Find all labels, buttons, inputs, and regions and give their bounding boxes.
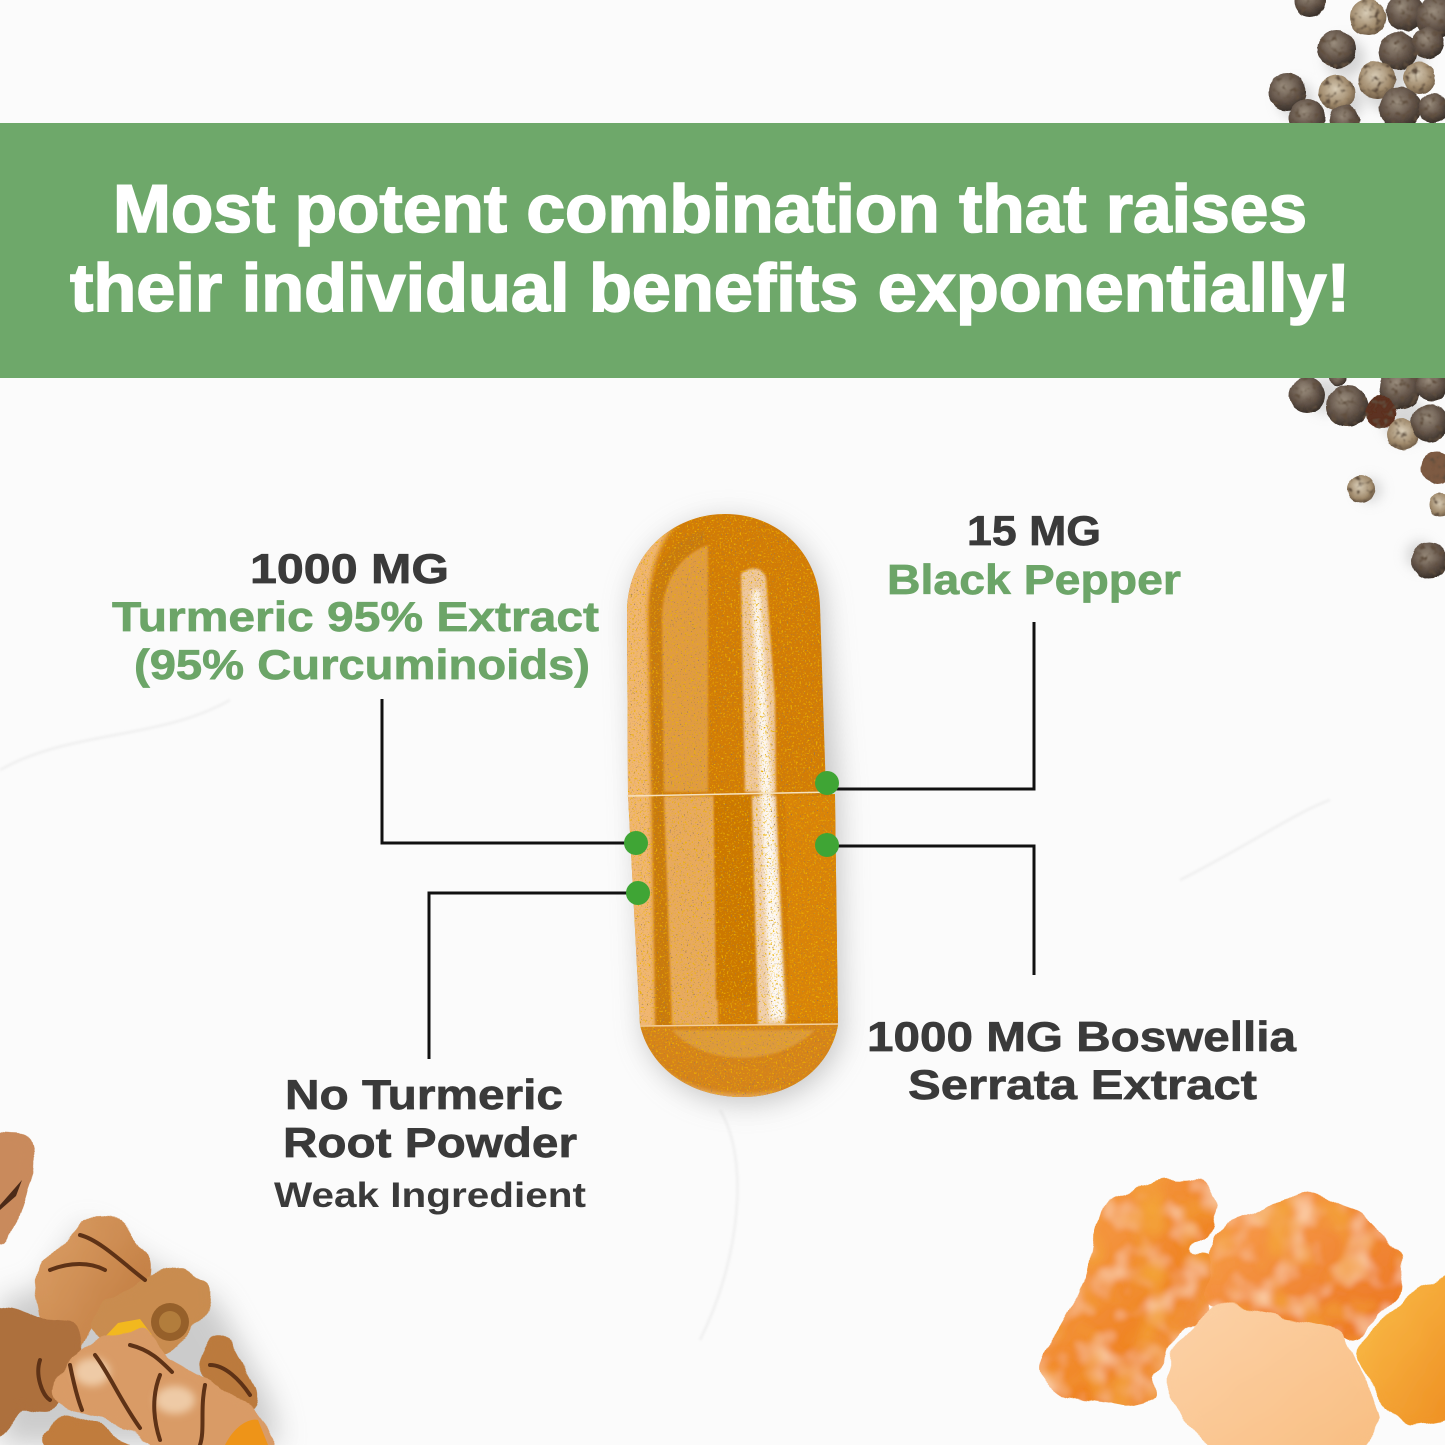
callout: boswellia: Serrata Extract [908,1061,1257,1108]
callout: no turmeric root powder [274,1071,586,1215]
callout: turmeric extract [112,545,599,688]
callout: turmeric extract: 1000 MG [250,545,449,592]
speckles [620,510,845,1105]
callout: no turmeric root powder: No Turmeric [285,1071,563,1118]
leader line: black pepper [836,622,1034,789]
black peppercorns, right below banner [1289,367,1445,579]
mottled left window [662,545,708,792]
callout: no turmeric root powder: Root Powder [283,1119,577,1166]
pale left wall [627,526,678,1079]
center orange lower [712,796,720,1001]
right orange [835,804,838,1020]
callout: black pepper: 15 MG [967,507,1101,554]
black peppercorns, top right [1268,0,1445,135]
bottom ring [640,1025,838,1097]
callout: turmeric extract: (95% Curcuminoids) [134,641,590,688]
title [70,171,1350,326]
callout: boswellia: 1000 MG Boswellia [867,1013,1297,1060]
title banner [0,123,1445,378]
callout: black pepper [887,507,1181,603]
dark orange seam [650,530,705,1030]
callout: turmeric extract: Turmeric 95% Extract [112,593,599,640]
leader line: no turmeric root powder [429,893,628,1059]
callout: boswellia [867,1013,1297,1108]
highlight column [741,568,776,792]
callout: no turmeric root powder: Weak Ingredient [274,1176,586,1215]
title: Most potent combination that raises [113,171,1307,247]
callout: black pepper: Black Pepper [887,556,1181,603]
leader line: boswellia [836,846,1034,975]
boswellia resin, bottom right [1040,1175,1445,1445]
turmeric roots, bottom left [0,1132,280,1445]
capsule [620,510,845,1105]
lower left window [664,796,718,1025]
title: their individual benefits exponentially! [70,250,1350,326]
leader line: turmeric extract [382,699,626,843]
callout markers [624,771,839,905]
